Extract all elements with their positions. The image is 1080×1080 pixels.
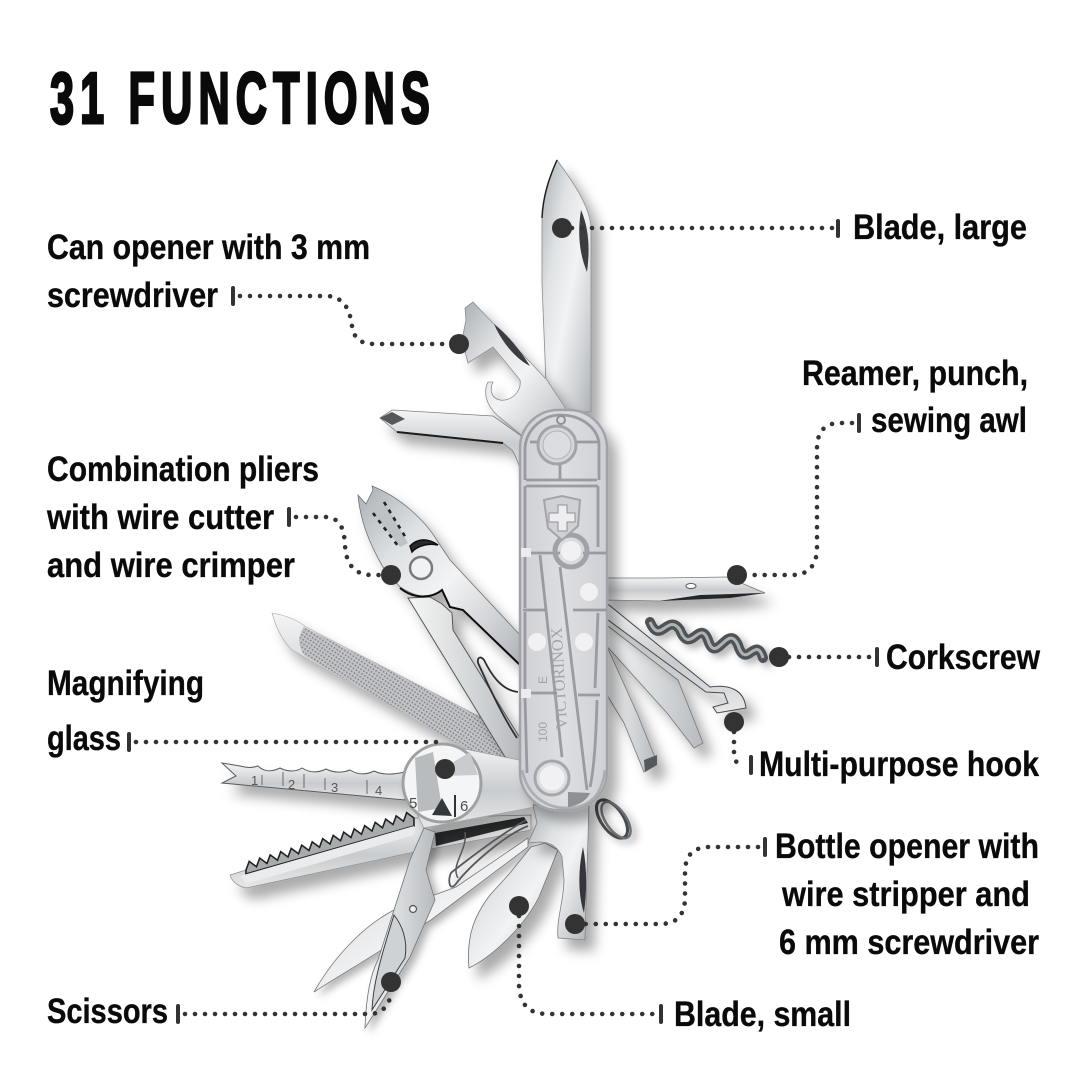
leader: corkscrew — [769, 647, 877, 667]
label: can opener: screwdriver — [47, 276, 218, 315]
leader: can opener — [233, 288, 469, 354]
leader: blade, small — [509, 896, 661, 1022]
label: blade, large: Blade, large — [853, 208, 1027, 247]
handle: E — [536, 676, 550, 684]
ruler tool: 1 — [251, 773, 258, 788]
label: reamer: Reamer, punch, — [802, 354, 1028, 393]
label: bottle opener: 6 mm screwdriver — [779, 923, 1039, 962]
key ring — [590, 795, 636, 843]
ruler tool — [222, 763, 405, 800]
leader: scissors — [178, 972, 401, 1022]
corkscrew — [650, 622, 763, 658]
magnifying glass — [403, 744, 535, 828]
leader: multi-purpose hook — [724, 712, 751, 773]
ruler tool: 2 — [288, 777, 295, 792]
label: can opener: Can opener with 3 mm — [47, 228, 370, 267]
label: combination pliers — [46, 450, 319, 585]
leader: bottle opener — [565, 839, 765, 934]
small blade — [468, 843, 558, 968]
handle: 100 — [536, 722, 550, 742]
label: combination pliers: and wire crimper — [47, 546, 295, 585]
scissors — [314, 820, 528, 1028]
pliers — [358, 486, 520, 762]
can opener — [462, 302, 568, 440]
label: bottle opener: Bottle opener with — [775, 827, 1039, 866]
label: combination pliers: with wire cutter — [46, 498, 274, 537]
multi-purpose hook — [604, 601, 746, 713]
knife illustration — [222, 160, 765, 1028]
label: bottle opener — [775, 827, 1039, 962]
ruler tool: 3 — [331, 780, 338, 795]
large blade — [542, 160, 591, 412]
title: 31 FUNCTIONS — [50, 58, 430, 139]
label: can opener — [47, 228, 370, 315]
label: magnifying glass — [47, 664, 204, 758]
label: magnifying glass: Magnifying — [47, 664, 204, 703]
label: multi-purpose hook: Multi-purpose hook — [759, 745, 1039, 784]
magnifying glass: 6 — [460, 798, 468, 815]
saw — [230, 813, 531, 888]
chisel tool — [604, 623, 703, 748]
handle — [520, 410, 607, 810]
leader: combination pliers — [289, 509, 401, 585]
leader: reamer — [727, 415, 859, 585]
bottle opener — [528, 805, 589, 940]
leader: magnifying glass — [129, 734, 455, 779]
label: blade, small: Blade, small — [674, 995, 851, 1034]
label: magnifying glass: glass — [47, 719, 121, 758]
phillips screwdriver — [380, 410, 527, 472]
label: scissors: Scissors — [47, 992, 168, 1031]
flat screwdriver — [604, 640, 657, 772]
magnifying glass: 5 — [409, 795, 417, 812]
label: bottle opener: wire stripper and — [781, 875, 1030, 914]
handle: VICTORINOX — [549, 626, 571, 730]
ruler tool: 4 — [375, 783, 382, 798]
nail file — [272, 613, 506, 757]
label: reamer: sewing awl — [871, 401, 1027, 440]
leader: blade, large — [552, 218, 838, 238]
label: combination pliers: Combination pliers — [47, 450, 319, 489]
label: corkscrew: Corkscrew — [886, 638, 1041, 677]
reamer — [604, 577, 765, 601]
label: reamer — [802, 354, 1028, 440]
